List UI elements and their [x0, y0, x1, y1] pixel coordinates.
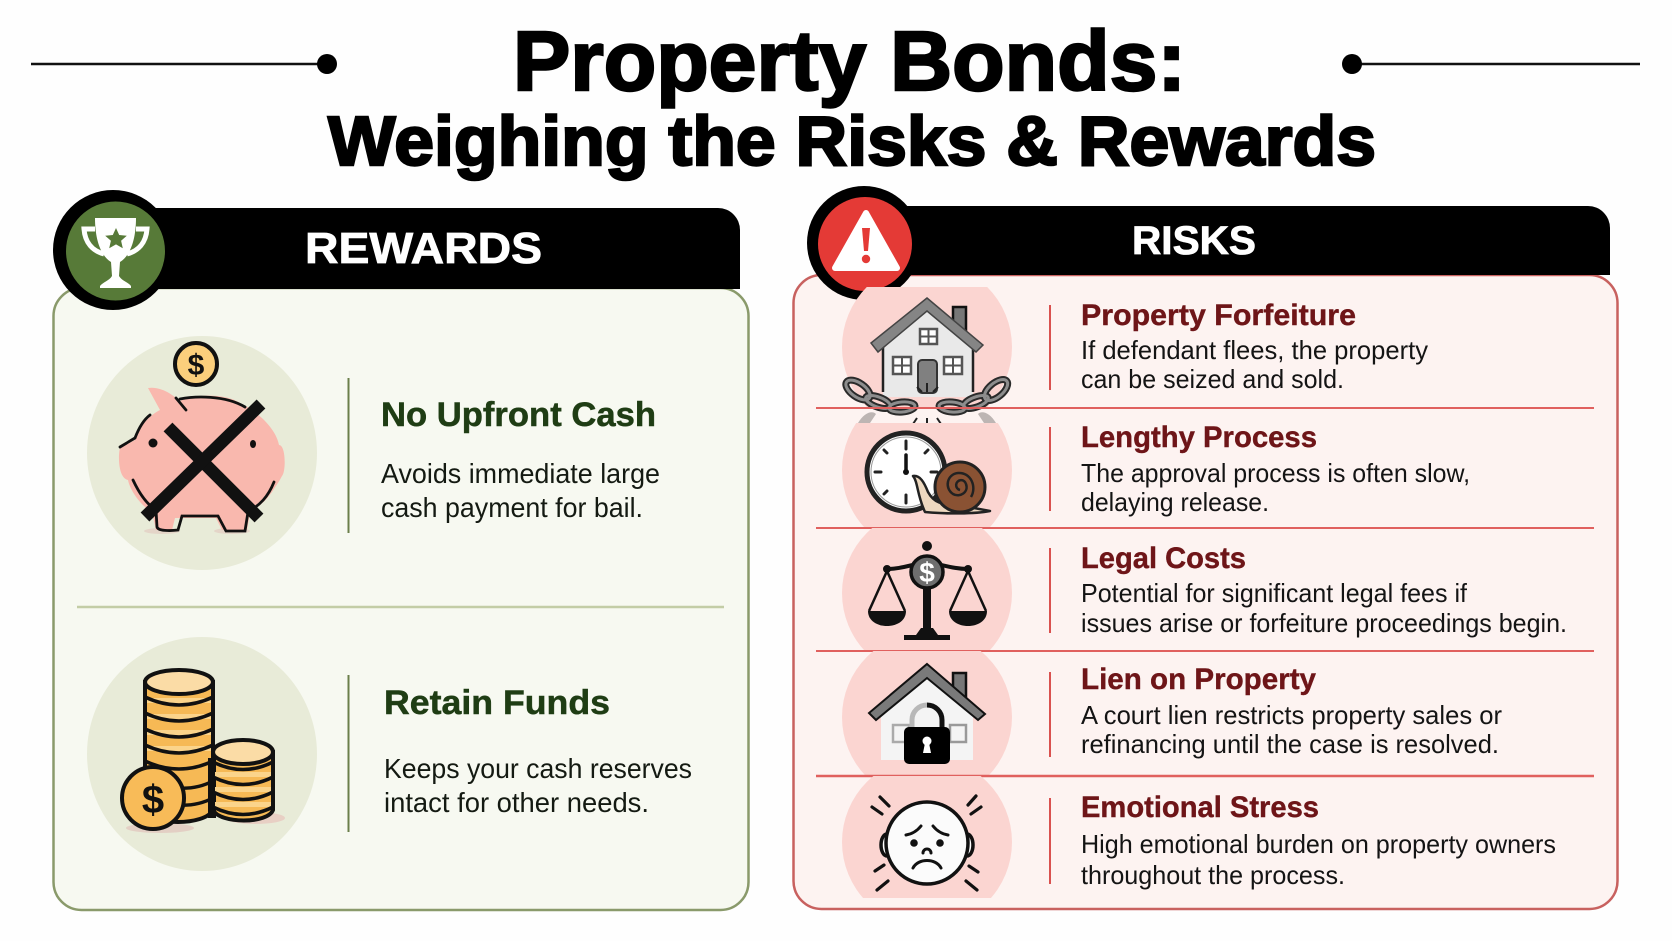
rewards heading: REWARDS: [305, 224, 542, 273]
risk description: A court lien restricts property sales or: [1081, 700, 1502, 730]
icon: crossed-out piggy bank: [87, 336, 317, 570]
reward description: [384, 753, 692, 818]
reward description: [381, 458, 660, 523]
icon: crossed-out piggy bank: $: [188, 349, 205, 382]
icon: scales with dollar: $: [919, 557, 935, 588]
reward row: retain funds: [87, 637, 692, 871]
reward description: Keeps your cash reserves: [384, 753, 692, 784]
risk row: property forfeiture: [842, 287, 1428, 423]
panel: risks: [794, 186, 1618, 927]
title rule right: [1342, 54, 1640, 74]
risk heading: Emotional Stress: [1081, 791, 1319, 824]
icon: clock and snail: [842, 423, 1012, 527]
risk description: High emotional burden on property owners: [1081, 829, 1556, 859]
icon: scales with dollar: [842, 528, 1012, 650]
risk row: emotional stress: [842, 776, 1555, 898]
rewards header bar: [110, 208, 740, 289]
icon: warning badge: [807, 186, 921, 300]
risk description: [1081, 335, 1428, 394]
risks heading: RISKS: [1132, 219, 1256, 263]
reward row: no upfront cash: [87, 336, 660, 570]
reward description: cash payment for bail.: [381, 492, 643, 523]
title rule left: [31, 54, 337, 74]
reward description: Avoids immediate large: [381, 458, 660, 489]
reward description: intact for other needs.: [384, 787, 649, 818]
icon: coin stacks: $: [142, 778, 164, 822]
risk description: [1081, 578, 1567, 638]
risk heading: Lengthy Process: [1081, 421, 1317, 454]
risk description: issues arise or forfeiture proceedings begin.: [1081, 608, 1567, 638]
title: Property Bonds:: [513, 14, 1186, 108]
title: [328, 14, 1376, 180]
reward heading: Retain Funds: [384, 684, 610, 722]
reward heading: No Upfront Cash: [381, 396, 656, 434]
icon: trophy badge: [53, 190, 173, 310]
risk description: If defendant flees, the property: [1081, 335, 1428, 365]
icon: chained house: [842, 287, 1012, 423]
risk heading: Property Forfeiture: [1081, 299, 1356, 332]
icon: coin stacks: [87, 637, 317, 871]
risk row: lengthy process: [842, 423, 1468, 527]
risk description: [1081, 700, 1502, 759]
risk description: [1081, 829, 1556, 890]
risk description: can be seized and sold.: [1081, 364, 1344, 394]
risk description: The approval process is often slow,: [1081, 458, 1470, 488]
risk heading: Lien on Property: [1081, 663, 1316, 696]
risk description: refinancing until the case is resolved.: [1081, 729, 1499, 759]
risk row: lien on property: [842, 651, 1502, 775]
title: Weighing the Risks & Rewards: [328, 102, 1376, 180]
panel: rewards: [53, 190, 748, 910]
risks header bar: [865, 206, 1610, 275]
risk description: delaying release.: [1081, 487, 1269, 517]
risk heading: Legal Costs: [1081, 542, 1246, 575]
icon: stressed face: [842, 776, 1012, 898]
icon: padlocked house: [842, 651, 1012, 775]
risk row: legal costs: [842, 528, 1565, 650]
risk description: Potential for significant legal fees if: [1081, 578, 1468, 608]
risk description: [1081, 458, 1470, 517]
risk description: throughout the process.: [1081, 860, 1345, 890]
